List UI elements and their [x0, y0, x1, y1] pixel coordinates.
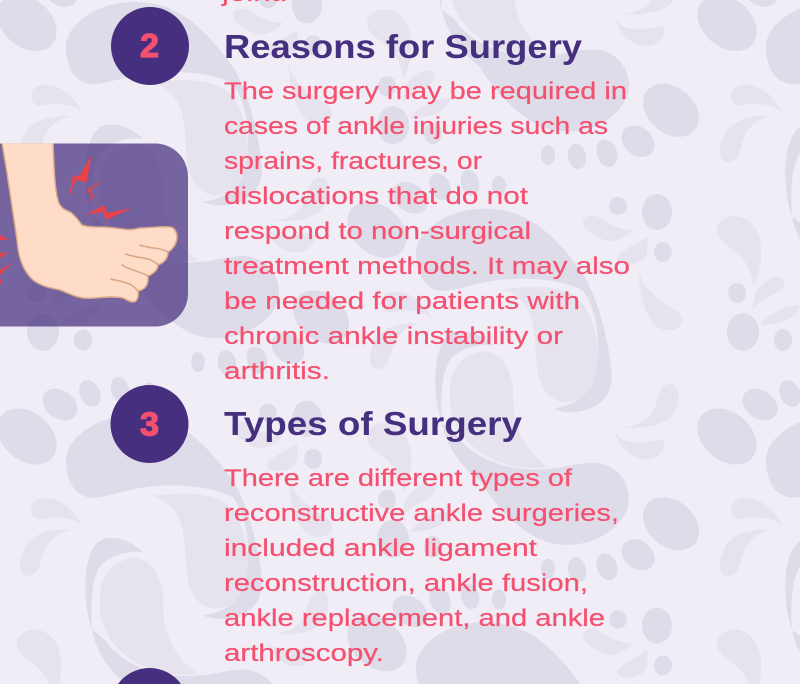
- text block: types description: reconstruction, ankle fusion,: [224, 570, 588, 597]
- text block: types description: arthroscopy.: [224, 640, 384, 667]
- number badge 4 (cropped at bottom edge): [118, 668, 181, 684]
- text block: reasons description: treatment methods. It may also: [224, 253, 630, 280]
- section 3: types of surgery: [110, 385, 619, 667]
- text block: reasons description: arthritis.: [224, 358, 330, 385]
- text block: reasons description: [224, 78, 630, 385]
- icon: foot: [2, 143, 177, 302]
- text block: reasons description: sprains, fractures, or: [224, 148, 482, 175]
- text block: reasons description: The surgery may be required in: [224, 78, 627, 105]
- text block: reasons description: dislocations that do not: [224, 183, 528, 210]
- number badge 3: [110, 385, 188, 463]
- number badge 3: 3: [140, 406, 159, 442]
- text block: reasons description: chronic ankle instability or: [224, 323, 563, 350]
- icon: pain bolts: [0, 155, 132, 284]
- text block: reasons description: be needed for patients with: [224, 288, 580, 315]
- text block: types description: reconstructive ankle surgeries,: [224, 500, 619, 527]
- text block: types description: There are different types of: [224, 465, 572, 492]
- text block: types description: [224, 465, 619, 667]
- number badge 2: [111, 7, 189, 85]
- heading: reasons for surgery: Reasons for Surgery: [224, 28, 583, 65]
- panel: injured foot illustration: [0, 143, 188, 326]
- text block: reasons description: respond to non-surgical: [224, 218, 531, 245]
- text block: types description: ankle replacement, and ankle: [224, 605, 605, 632]
- number badge 2: 2: [140, 27, 159, 64]
- text block: types description: included ankle ligament: [224, 535, 537, 562]
- text block: reasons description: cases of ankle injuries such as: [224, 113, 608, 140]
- heading: types of surgery: Types of Surgery: [224, 405, 523, 442]
- section 2: reasons for surgery: [111, 7, 630, 385]
